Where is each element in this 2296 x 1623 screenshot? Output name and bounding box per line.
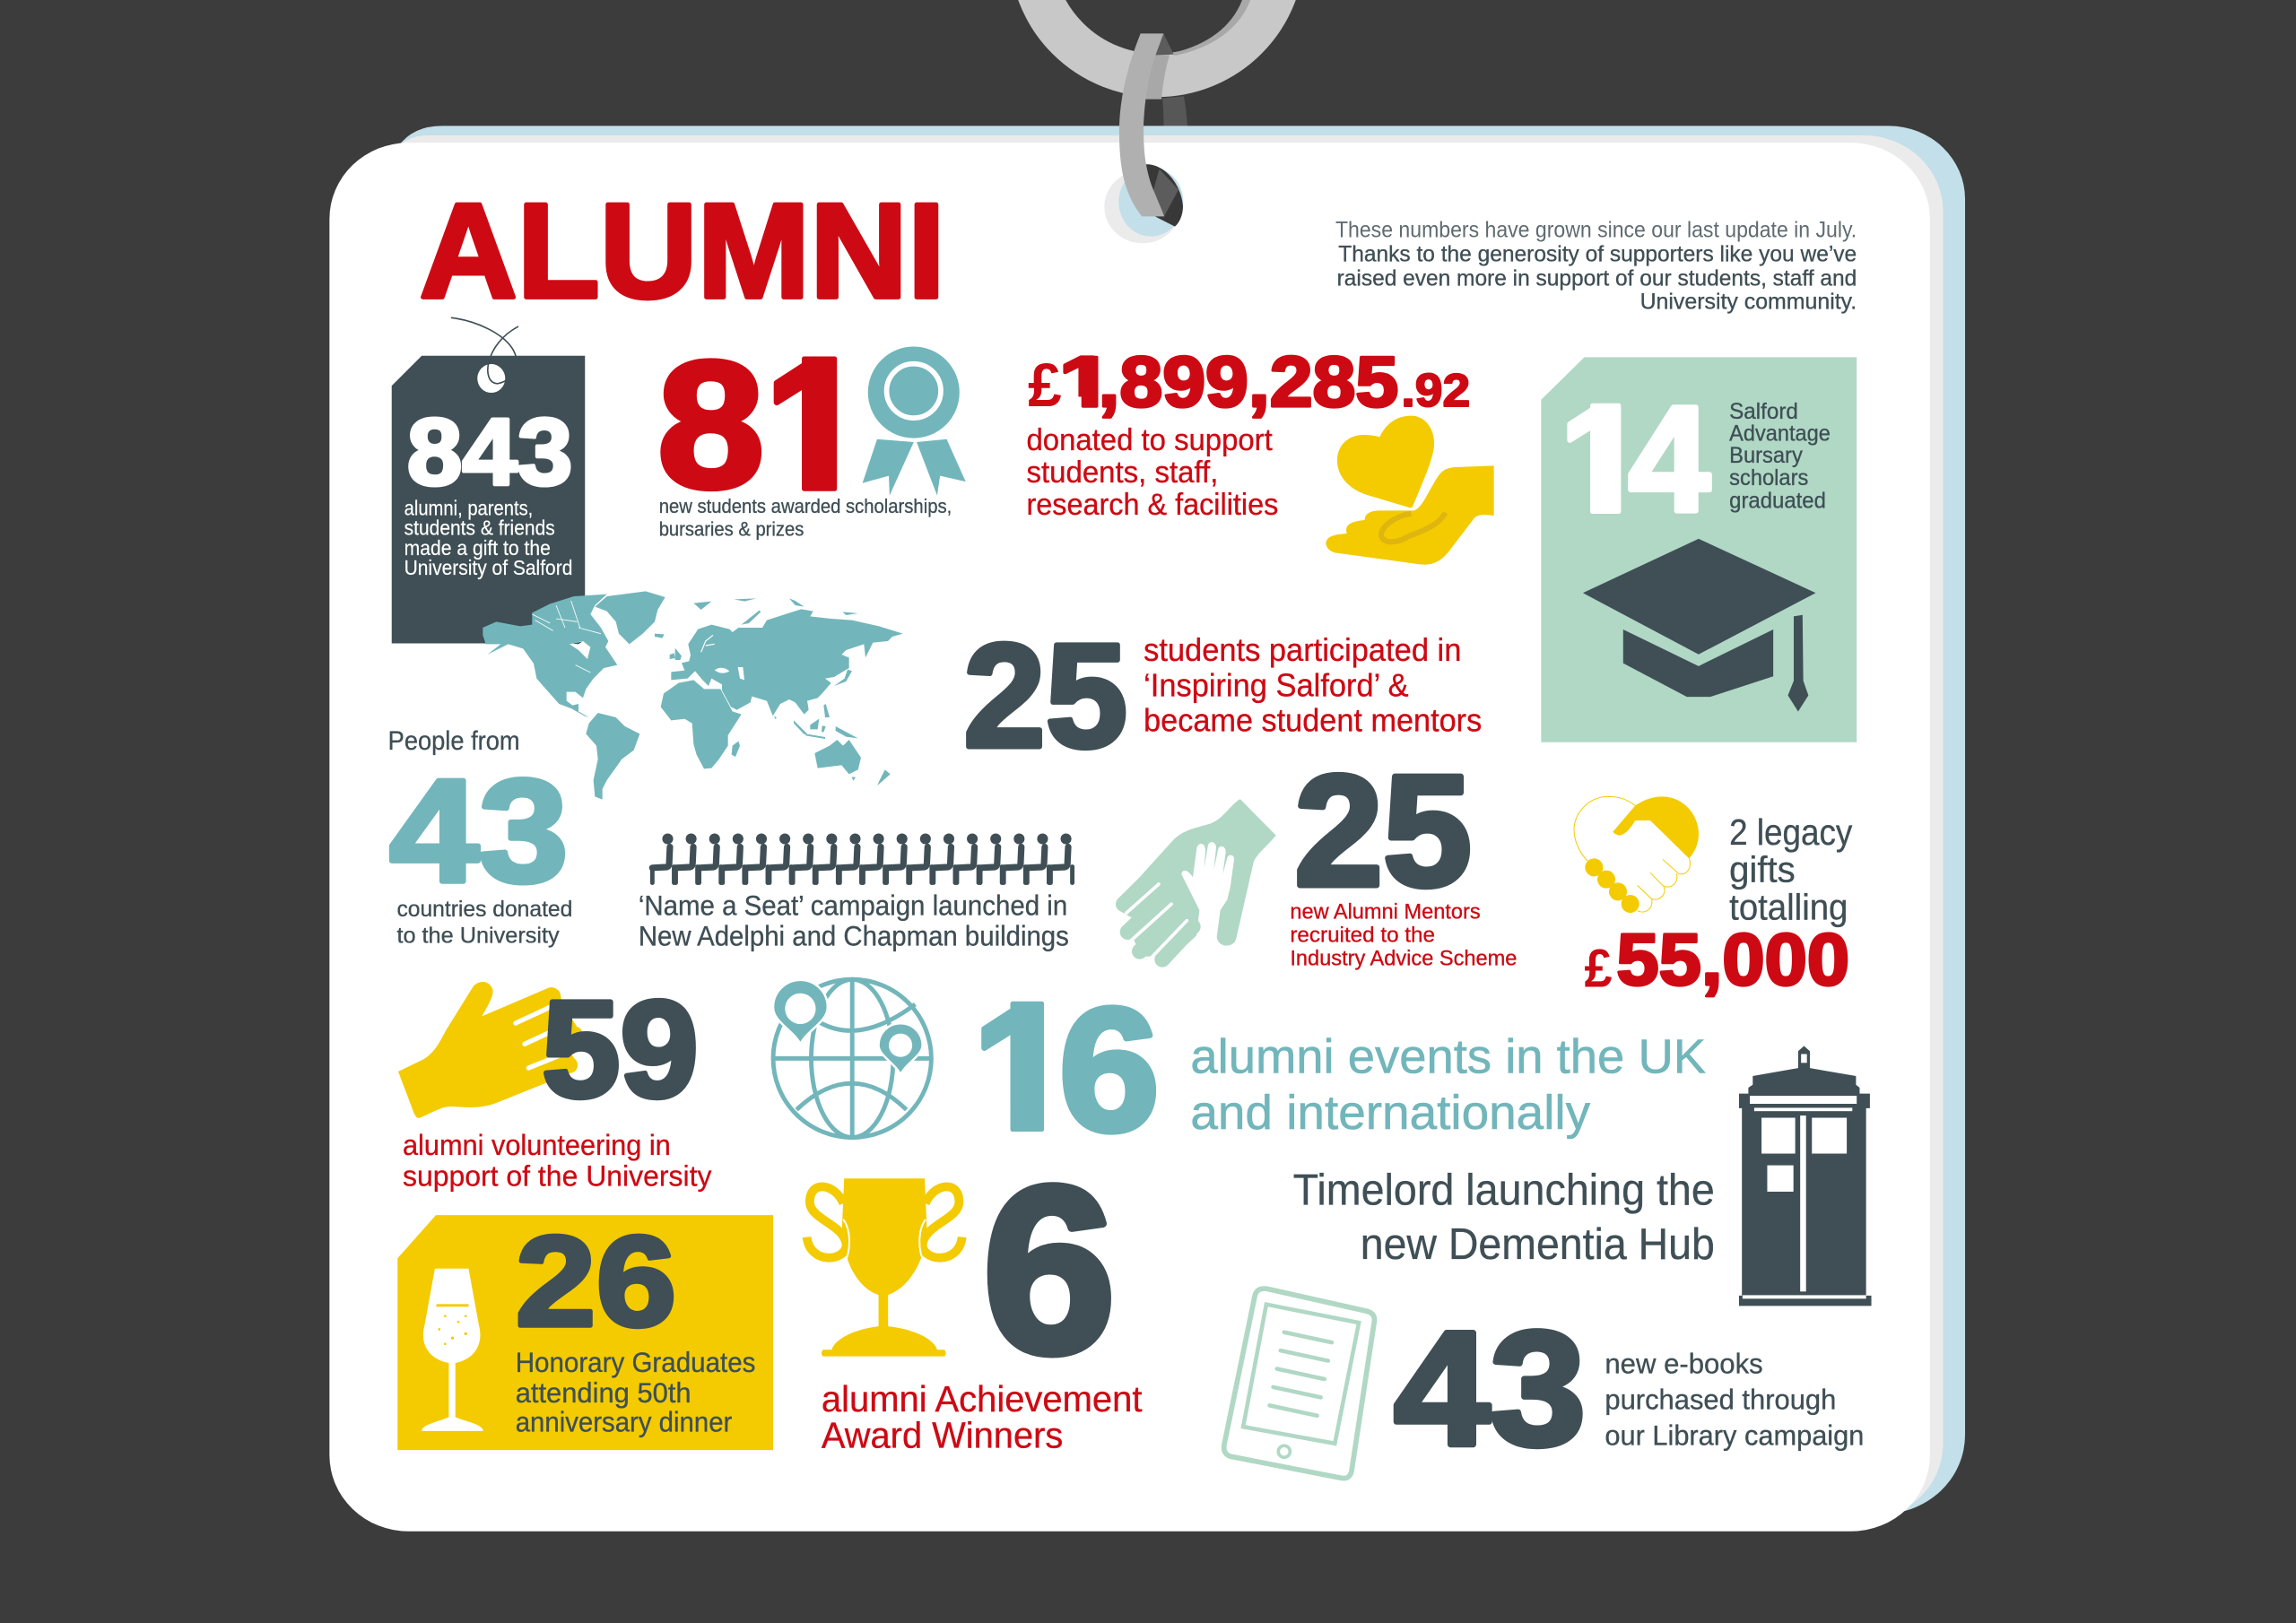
events caption: alumni events in the UK [1190, 1030, 1706, 1084]
icon: raised hand [398, 982, 582, 1118]
name a seat caption: ‘Name a Seat’ campaign launched in [639, 890, 1067, 921]
16 events stat [963, 971, 1706, 1167]
16 events stat: 1 [972, 971, 1070, 1167]
tag caption: alumni, parents, [404, 497, 533, 520]
intro text: Thanks to the generosity of supporters like you we’ve [1338, 241, 1857, 266]
intro text [1335, 217, 1857, 314]
countries number: 43 [389, 749, 568, 913]
icon: trophy [807, 1178, 962, 1357]
name a seat caption: New Adelphi and Chapman buildings [639, 921, 1069, 952]
graduates number: 26 [516, 1210, 676, 1353]
81 scholarships stat [657, 324, 966, 541]
icon: e-reader tablet [1224, 1289, 1374, 1479]
tag caption: students & friends [404, 516, 555, 540]
icon: world map [483, 591, 903, 800]
legacy amount: £ [1585, 937, 1613, 998]
25 alumni mentors stat: 25 [1294, 742, 1472, 919]
icon: champagne glass [422, 1269, 483, 1431]
donation caption: students, staff, [1026, 456, 1218, 490]
countries caption: countries donated [396, 897, 572, 922]
donation caption [1026, 423, 1278, 522]
icon: graduation cap [1583, 539, 1815, 711]
donation total stat [1026, 342, 1470, 522]
donation total stat: ,899,285 [1098, 342, 1398, 421]
tag hole [477, 364, 505, 393]
scholarships caption [659, 495, 952, 541]
81 scholarships stat: 8 [657, 324, 764, 525]
e-books caption: our Library campaign [1605, 1419, 1864, 1451]
59 volunteers stat [403, 972, 712, 1192]
e-books caption: new e-books [1605, 1347, 1763, 1379]
graduates caption: anniversary dinner [516, 1407, 732, 1438]
events caption [1190, 1030, 1706, 1140]
bursary number: 1 [1560, 375, 1643, 543]
legacy gifts stat: totalling [1729, 886, 1848, 927]
countries caption [396, 897, 572, 948]
legacy gifts stat [1585, 812, 1853, 1001]
graduates caption: Honorary Graduates [516, 1347, 755, 1378]
25 student mentors stat: 25 [963, 613, 1127, 778]
tag caption [404, 497, 572, 579]
e-books caption: purchased through [1605, 1383, 1836, 1415]
events caption: and internationally [1190, 1086, 1590, 1140]
43 e-books stat [1394, 1298, 1864, 1480]
bursary caption: Salford [1729, 399, 1798, 424]
award winners caption [822, 1378, 1143, 1456]
title: ALUMNI [420, 175, 945, 325]
graduates caption: attending 50th [516, 1377, 691, 1409]
award winners caption: alumni Achievement [822, 1378, 1143, 1419]
tag caption: University of Salford [404, 556, 572, 579]
donation total stat: .92 [1401, 365, 1470, 417]
bursary caption: scholars [1729, 465, 1808, 490]
25 alumni mentors stat [1290, 742, 1517, 971]
6 award winners stat [822, 1138, 1143, 1456]
intro text: These numbers have grown since our last update in July. [1335, 217, 1857, 242]
panel: honorary graduates [397, 1210, 773, 1450]
panel: bursary scholars [1541, 357, 1857, 742]
tag caption: made a gift to the [404, 536, 551, 560]
icon: handshake heart [1574, 796, 1699, 913]
bursary number: 4 [1629, 375, 1710, 543]
timelord caption: new Dementia Hub [1361, 1220, 1715, 1269]
icon: police box [1739, 1046, 1872, 1306]
bursary caption [1729, 399, 1831, 514]
43 countries stat: People from [388, 726, 520, 756]
card: middle grey layer [398, 135, 1944, 1520]
legacy gifts stat: gifts [1729, 849, 1796, 890]
keyring strap and card hole [1104, 33, 1183, 243]
volunteers caption: support of the University [403, 1159, 712, 1192]
25 student mentors stat [963, 613, 1482, 778]
icon: globe with pins [773, 979, 931, 1138]
student mentors caption [1144, 631, 1482, 739]
scholarships caption: new students awarded scholarships, [659, 495, 952, 517]
keyring ring and strap back [1031, 0, 1283, 141]
name a seat caption [639, 890, 1069, 952]
student mentors caption: ‘Inspiring Salford’ & [1144, 666, 1409, 703]
59 volunteers stat: 59 [542, 972, 699, 1126]
panel: donor tag [392, 317, 585, 644]
alumni mentors caption: new Alumni Mentors [1290, 900, 1481, 924]
16 events stat: 6 [1058, 971, 1160, 1167]
timelord caption: Timelord launching the [1293, 1167, 1715, 1215]
icon: row of seats [652, 833, 1073, 882]
icon: heart in hand [1326, 416, 1494, 565]
volunteers caption: alumni volunteering in [403, 1128, 671, 1161]
intro text: University community. [1640, 289, 1857, 314]
student mentors caption: became student mentors [1144, 702, 1482, 739]
tag number: 843 [407, 399, 572, 505]
countries caption: to the University [396, 923, 560, 948]
legacy amount: 55,000 [1616, 919, 1849, 1001]
card: front white panel [329, 143, 1930, 1532]
intro text: raised even more in support of our students, staff and [1337, 265, 1857, 291]
43 e-books stat: 43 [1394, 1298, 1586, 1480]
icon: adult and child hands [1117, 800, 1276, 966]
alumni mentors caption: Industry Advice Scheme [1290, 948, 1517, 971]
award winners caption: Award Winners [822, 1415, 1063, 1456]
6 award winners stat: 6 [983, 1138, 1116, 1402]
bursary number [1552, 375, 1710, 543]
alumni mentors caption: recruited to the [1290, 924, 1435, 948]
student mentors caption: students participated in [1144, 631, 1461, 668]
card: back blue layer [398, 126, 1965, 1514]
timelord caption [1293, 1167, 1715, 1269]
donation caption: donated to support [1026, 423, 1273, 457]
alumni mentors caption [1290, 900, 1517, 971]
81 scholarships stat: 1 [764, 324, 865, 525]
bursary caption: Bursary [1729, 443, 1803, 468]
43 countries stat [388, 726, 572, 948]
donation total stat: 1 [1059, 342, 1110, 421]
bursary caption: Advantage [1729, 421, 1831, 446]
bursary caption: graduated [1729, 489, 1826, 514]
legacy gifts stat: 2 legacy [1729, 812, 1853, 853]
donation total stat: £ [1028, 351, 1062, 420]
tag string [451, 317, 518, 384]
e-books caption [1605, 1347, 1864, 1451]
icon: rosette [863, 345, 966, 496]
volunteers caption [403, 1128, 712, 1192]
graduates caption [516, 1347, 755, 1438]
scholarships caption: bursaries & prizes [659, 518, 804, 541]
donation caption: research & facilities [1026, 488, 1278, 522]
